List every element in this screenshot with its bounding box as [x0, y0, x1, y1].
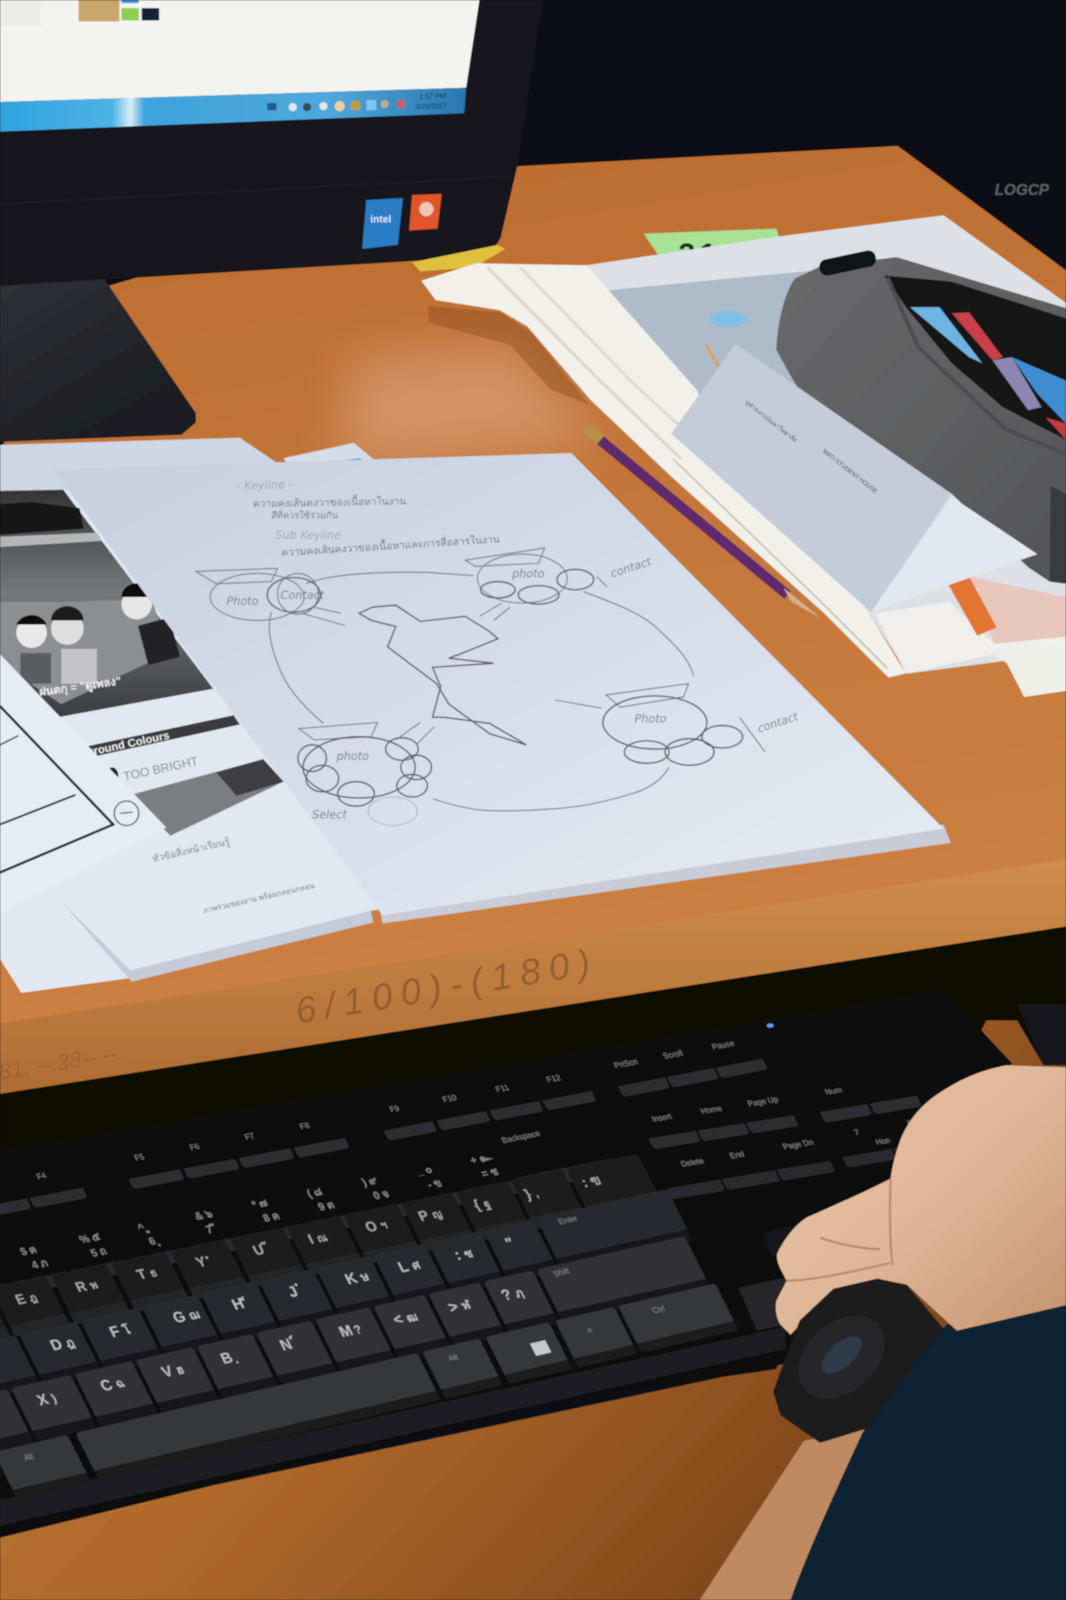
- carved marks on desk edge: 81. --.38-- --.: [0, 1040, 125, 1085]
- sketch cluster bottom-left: Select: [312, 808, 347, 821]
- paper thickness: [379, 824, 951, 923]
- dark squiggle icon: [106, 767, 118, 786]
- envelope address: MATI STUDENT HOUSE: [821, 448, 879, 495]
- delete end page down keys: End: [728, 1150, 746, 1160]
- screen clock: 1:57 PM: [419, 92, 446, 101]
- QWERTY key row: Rพ: [73, 1277, 101, 1296]
- number key row: _ ๐: [413, 1164, 435, 1178]
- function key row: F12: [545, 1073, 563, 1084]
- grey gradient sample: [131, 759, 284, 836]
- delete end page down keys: Delete: [679, 1156, 706, 1169]
- handwritten notes: สีที่ควรใช้ร่วมกัน: [271, 508, 339, 520]
- pouch handle: [986, 644, 1066, 697]
- blue note: [284, 443, 380, 480]
- windows logo: [530, 1340, 551, 1356]
- sketch cluster top-right: [465, 548, 653, 620]
- too bright label: TOO BRIGHT: [122, 754, 200, 784]
- poster caption: ฝนตกุ = "ดูเพลง": [38, 675, 122, 700]
- number key row: & ๖: [193, 1208, 215, 1223]
- monitor: [0, 0, 543, 442]
- QWERTY key row: {ฐ: [471, 1195, 493, 1213]
- space key row: Ctrl: [651, 1304, 667, 1315]
- navigation keys top row: [604, 1031, 768, 1097]
- QWERTY key row: Tธ: [134, 1264, 160, 1283]
- worksheet circle mark: [114, 801, 139, 826]
- lower letter key row: ?ฦ: [498, 1284, 527, 1304]
- navigation keys top row: Scroll: [661, 1049, 685, 1061]
- under-desk shadow: [0, 927, 1066, 1276]
- function key row: F5: [133, 1152, 146, 1163]
- home key row: Enter: [557, 1214, 579, 1226]
- lower letter key row: <ฒ: [390, 1308, 421, 1329]
- number key row: * ๗: [250, 1197, 270, 1211]
- folded envelope: [671, 344, 1037, 612]
- arm and hand: [700, 1065, 1066, 1600]
- function key row: F4: [35, 1171, 49, 1181]
- sketch cluster top-left: [196, 568, 345, 626]
- delete end page down keys: [651, 1129, 835, 1200]
- function key row: F10: [441, 1093, 459, 1104]
- lower sheet footer: ภาพรวมของงาน พร้อมกลอนกลอน: [202, 881, 316, 915]
- big oval sketch: [269, 572, 694, 811]
- desk top: [0, 146, 1066, 1029]
- poster cloud header: [0, 502, 84, 535]
- poster sheet: [0, 480, 428, 970]
- numpad keys: 7: [853, 1128, 861, 1137]
- sketch cluster bottom-right: Photo: [634, 712, 667, 725]
- handwritten notes: [236, 478, 500, 559]
- keyboard body: [0, 990, 1012, 1538]
- monitor body: [0, 0, 543, 286]
- purple barrel: [993, 357, 1042, 410]
- white zipper band: [421, 263, 906, 678]
- handwritten notes: Sub Keyline: [275, 529, 341, 542]
- lower letter key row: M?: [336, 1320, 365, 1341]
- sketch cluster top-left: Photo: [226, 595, 259, 608]
- pencil case opening: [884, 276, 1066, 440]
- number key row: % ๕: [77, 1231, 103, 1246]
- green desk number label: 31: [678, 237, 721, 271]
- sketch cluster top-right: photo: [511, 568, 545, 581]
- lower letter key row: Vฮ: [159, 1361, 187, 1381]
- number key row: + ๛: [468, 1151, 495, 1167]
- QWERTY key row: Oฯ: [363, 1217, 390, 1236]
- function key row: F7: [243, 1131, 257, 1142]
- translucent body: [587, 215, 1066, 673]
- sketch cluster bottom-left: [298, 722, 435, 826]
- lower letter key row: N์: [277, 1335, 300, 1354]
- handwritten notes: - Keyline -: [236, 478, 293, 493]
- lower letter key row: Bฺ: [218, 1349, 240, 1368]
- ubuntu sticker: [409, 194, 442, 231]
- number key row: ( ๘: [305, 1186, 325, 1200]
- plastic zip pouch: [421, 215, 1066, 697]
- arrow keys: [739, 1222, 806, 1331]
- number key row: Backspace: [500, 1129, 542, 1145]
- case end shade: [1050, 486, 1066, 584]
- orange pen: [948, 577, 997, 636]
- pink shade at pouch bottom: [969, 577, 1066, 645]
- space key row: Alt: [22, 1452, 36, 1462]
- desk front edge: [0, 859, 1066, 1094]
- home key row: H็: [229, 1295, 250, 1314]
- function key row: F8: [298, 1121, 312, 1131]
- intel sticker: [362, 198, 403, 249]
- lower letter key row: [0, 1236, 711, 1456]
- QWERTY key row: Yํ: [193, 1253, 214, 1271]
- poster cartoon group: [0, 583, 180, 704]
- space key row: [0, 1283, 739, 1499]
- left paper stack: [0, 438, 428, 993]
- background colours heading: ground Colours: [86, 730, 171, 759]
- sketch cluster top-left: Contact: [281, 589, 325, 602]
- numpad keys: Num: [824, 1086, 844, 1097]
- space key row: Alt: [447, 1352, 460, 1363]
- worksheet table: [0, 706, 113, 872]
- sketch cluster top-right: contact: [609, 555, 653, 580]
- lower letter key row: Cฉ: [97, 1374, 127, 1395]
- sketch cluster bottom-right: contact: [756, 710, 800, 736]
- home key row: Kษ: [342, 1268, 372, 1288]
- home key row: Gฌ: [170, 1305, 203, 1327]
- function key row: F6: [188, 1142, 202, 1152]
- insert home page up keys: [634, 1087, 799, 1149]
- number key row: ) ๙: [360, 1175, 379, 1189]
- QWERTY key row: U๊: [250, 1241, 272, 1259]
- poster dark panel: [0, 490, 213, 717]
- number key row: = ช: [479, 1166, 501, 1180]
- navigation keys top row: Pause: [710, 1039, 737, 1051]
- number key row: 4 ภ: [29, 1257, 50, 1272]
- bottom-left sheet: [0, 878, 135, 993]
- number key row: 9 ต: [316, 1199, 337, 1213]
- status led: [767, 1023, 774, 1028]
- thumbnails on screen: [0, 0, 159, 27]
- QWERTY key row: },: [522, 1185, 541, 1203]
- QWERTY key row: [0, 1154, 662, 1349]
- number key row: - ข: [425, 1177, 444, 1191]
- number key row: 5 ถ: [89, 1245, 109, 1260]
- envelope text: จุฬาลงกรณ์มหาวิทยาลัย: [743, 398, 799, 444]
- number key row: ^ ู: [136, 1221, 151, 1235]
- navy sleeve: [791, 1305, 1066, 1600]
- light blue pen: [910, 307, 982, 363]
- lower sheet stack edge: [57, 897, 373, 982]
- number key row: [0, 1117, 620, 1306]
- bezel seam: [0, 177, 510, 204]
- insert home page up keys: Page Up: [746, 1095, 780, 1108]
- sketch cluster bottom-right: [555, 684, 800, 765]
- intel sticker: intel: [370, 214, 391, 225]
- paper sheet: [53, 453, 944, 915]
- lower letter key row: Shift: [552, 1267, 572, 1279]
- windows taskbar: [0, 88, 466, 132]
- back sheet: [0, 438, 284, 510]
- home key row: Dฎ: [47, 1334, 77, 1354]
- QWERTY key row: Iณ: [306, 1229, 330, 1248]
- handwritten notes: ความคงเส้นคงวาของเนื้อหาในงาน: [253, 492, 406, 510]
- number key row: 7 ึ: [203, 1222, 220, 1236]
- QWERTY key row: Pญ: [416, 1205, 445, 1225]
- dark object right of keyboard: [1017, 1004, 1066, 1065]
- space key row: ≡: [585, 1326, 594, 1335]
- monitor screen: [0, 0, 479, 102]
- poster subtitle strip: [0, 533, 102, 547]
- screen date: 3/29/2017: [415, 102, 448, 111]
- yellow cable tie: [412, 245, 505, 271]
- poster heading bar: [84, 715, 240, 758]
- keyboard front lip: [0, 1327, 785, 1526]
- home key row: [0, 1189, 693, 1399]
- function key row: F9: [388, 1104, 401, 1114]
- home key row: :ซ: [451, 1244, 476, 1264]
- keyboard: [0, 990, 1012, 1538]
- home key row: Lศ: [395, 1256, 424, 1276]
- fist and back of hand: [776, 1065, 1066, 1335]
- label on dark cabinet top right: LOGCP: [995, 182, 1050, 199]
- pencil case: [776, 249, 1066, 584]
- lower letter key row: >ฬ: [445, 1296, 474, 1316]
- navigation keys top row: PrtScn: [612, 1057, 640, 1070]
- number key row: 8 ค: [261, 1210, 282, 1225]
- lower sheet caption: หัวข้อสิ่งหน้าเรียนรู้: [151, 835, 231, 865]
- green desk number label: [644, 229, 780, 271]
- home key row: ": [502, 1235, 517, 1252]
- pale reflection on desk: [337, 342, 602, 465]
- function key row: F11: [494, 1083, 511, 1094]
- blue marker: [1012, 357, 1066, 423]
- QWERTY key row: Eฎ: [13, 1289, 40, 1308]
- red and white marker: [952, 312, 1003, 360]
- forearm: [700, 1429, 867, 1600]
- monitor stand: [0, 276, 196, 442]
- tray icons: [267, 100, 405, 111]
- numpad keys: [806, 1067, 948, 1168]
- pouch shadow on desk: [428, 306, 590, 405]
- main sketch paper: [53, 453, 951, 923]
- front worksheet: [0, 654, 166, 913]
- number key row: 0 จ: [371, 1188, 391, 1202]
- carved number on desk edge: 6/100)-(180): [292, 942, 593, 1031]
- number key row: $ ฅ: [18, 1244, 39, 1258]
- sketch cluster bottom-left: photo: [336, 750, 369, 763]
- numpad keys: 8: [906, 1119, 915, 1128]
- crinkled pouch bottom: [875, 602, 1066, 673]
- handwritten notes: ความคงเส้นคงวาของเนื้อหาและการสื่อสารในงาน: [281, 530, 500, 559]
- home key row: J๋: [285, 1283, 305, 1301]
- insert home page up keys: Insert: [650, 1112, 674, 1124]
- finger crease: [786, 1179, 893, 1281]
- red cap: [1046, 417, 1066, 440]
- function key row: [0, 1064, 597, 1219]
- pencil: [586, 428, 821, 618]
- number key row: 6 ุ: [147, 1235, 162, 1249]
- keyboard tray: [0, 1020, 1066, 1600]
- insert home page up keys: Home: [699, 1104, 724, 1116]
- zipper seam: [887, 278, 1066, 454]
- numpad keys: Home: [874, 1135, 899, 1147]
- wrist watch: [773, 1279, 944, 1443]
- delete end page down keys: Page Dn: [781, 1138, 815, 1151]
- Thailand map outline: [359, 605, 526, 745]
- QWERTY key row: : ฃ: [579, 1173, 604, 1191]
- lower letter key row: X): [34, 1389, 60, 1409]
- zipper pull: [818, 249, 877, 277]
- home key row: Fโ: [107, 1321, 134, 1341]
